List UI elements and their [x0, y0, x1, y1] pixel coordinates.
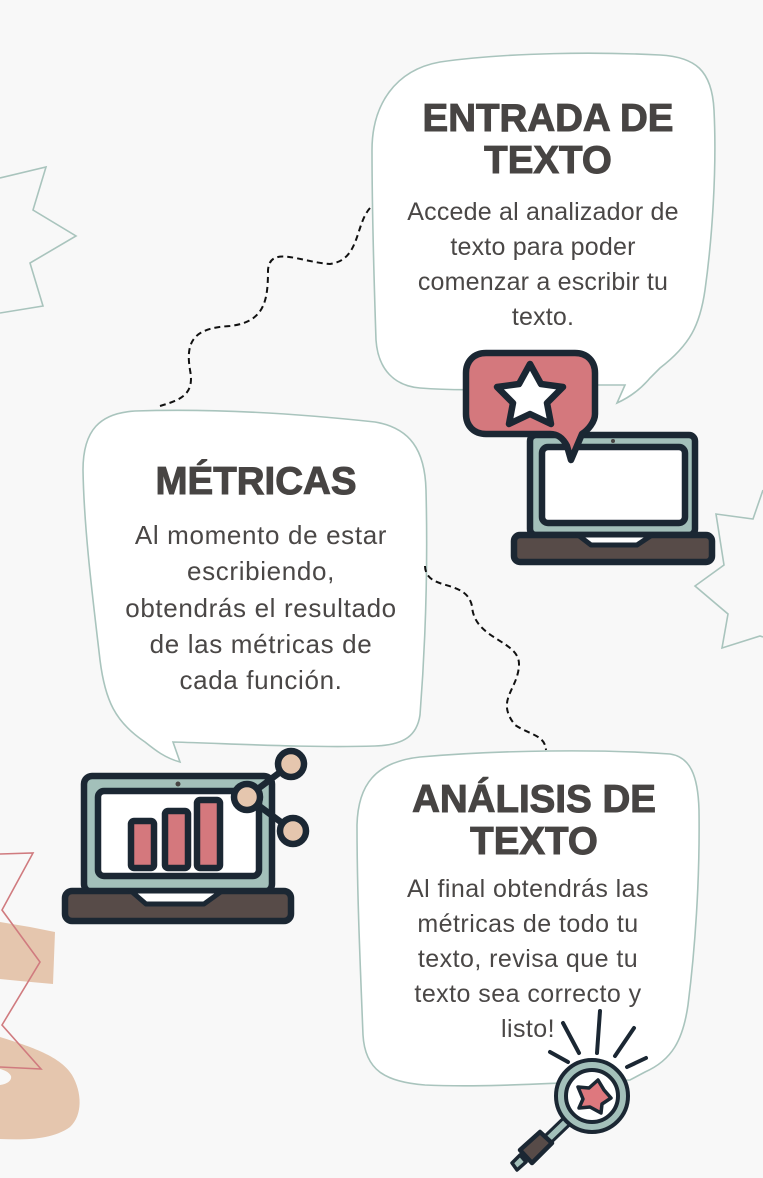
star: [578, 1080, 611, 1113]
description: escribiendo,: [187, 556, 335, 586]
laptop screen: [98, 791, 259, 876]
description: Accede al analizador de: [407, 198, 679, 226]
decorative shape: beige blob: [0, 1037, 80, 1139]
description: Al final obtendrás las: [407, 875, 649, 903]
icon: laptop with bar chart and share nodes: [65, 751, 306, 921]
lens: [556, 1060, 628, 1132]
heading: TEXTO: [470, 820, 598, 863]
laptop base: [514, 535, 712, 562]
icon: magnifying glass with star and rays: [512, 1011, 646, 1170]
decorative shape: beige rectangle: [0, 922, 55, 984]
description: texto.: [512, 303, 574, 331]
speech bubble: métricas: [83, 410, 427, 762]
description: Al momento de estar: [135, 520, 387, 550]
icon: laptop with speech bubble and star: [466, 353, 712, 562]
heading: TEXTO: [484, 139, 612, 182]
text block: métricas: [125, 459, 397, 695]
star: [497, 364, 563, 424]
description: texto para poder: [450, 233, 636, 261]
laptop base: [65, 891, 291, 921]
heading: [423, 97, 673, 182]
laptop notch: [131, 891, 222, 904]
decorative shape: left starburst outline: [0, 167, 76, 313]
speech bubble: [466, 353, 595, 460]
webcam: [611, 439, 615, 443]
laptop screen: [542, 447, 685, 523]
decorative shape: right starburst outline: [695, 490, 763, 648]
description: obtendrás el resultado: [125, 593, 397, 623]
description: cada función.: [179, 665, 343, 695]
description: texto, revisa que tu: [418, 945, 638, 973]
text block: análisis de texto: [407, 776, 656, 1043]
dashed connector: métricas to análisis: [425, 566, 546, 750]
speech bubble: entrada de texto: [372, 53, 715, 403]
webcam: [176, 782, 180, 786]
handle: [540, 1120, 568, 1147]
dashed connector: entrada to métricas: [160, 208, 370, 406]
rays: [550, 1011, 646, 1067]
description: listo!: [501, 1015, 555, 1043]
heading: ENTRADA DE: [423, 97, 673, 140]
speech bubble: análisis de texto: [357, 751, 699, 1086]
description: [407, 875, 649, 1043]
description: [125, 520, 397, 695]
bar chart: [131, 800, 220, 868]
share nodes: [234, 751, 306, 844]
decorative shape: red zigzag outline: [0, 853, 41, 1069]
description: comenzar a escribir tu: [418, 268, 668, 296]
text block: entrada de texto: [407, 97, 679, 331]
description: de las métricas de: [150, 629, 372, 659]
laptop lid: [84, 776, 272, 892]
laptop lid: [530, 435, 695, 535]
heading: MÉTRICAS: [155, 460, 357, 503]
heading: [412, 776, 656, 863]
heading: ANÁLISIS DE: [412, 778, 656, 821]
description: [407, 198, 679, 331]
description: texto sea correcto y: [414, 980, 642, 1008]
description: métricas de todo tu: [417, 910, 639, 938]
laptop notch: [578, 535, 652, 545]
